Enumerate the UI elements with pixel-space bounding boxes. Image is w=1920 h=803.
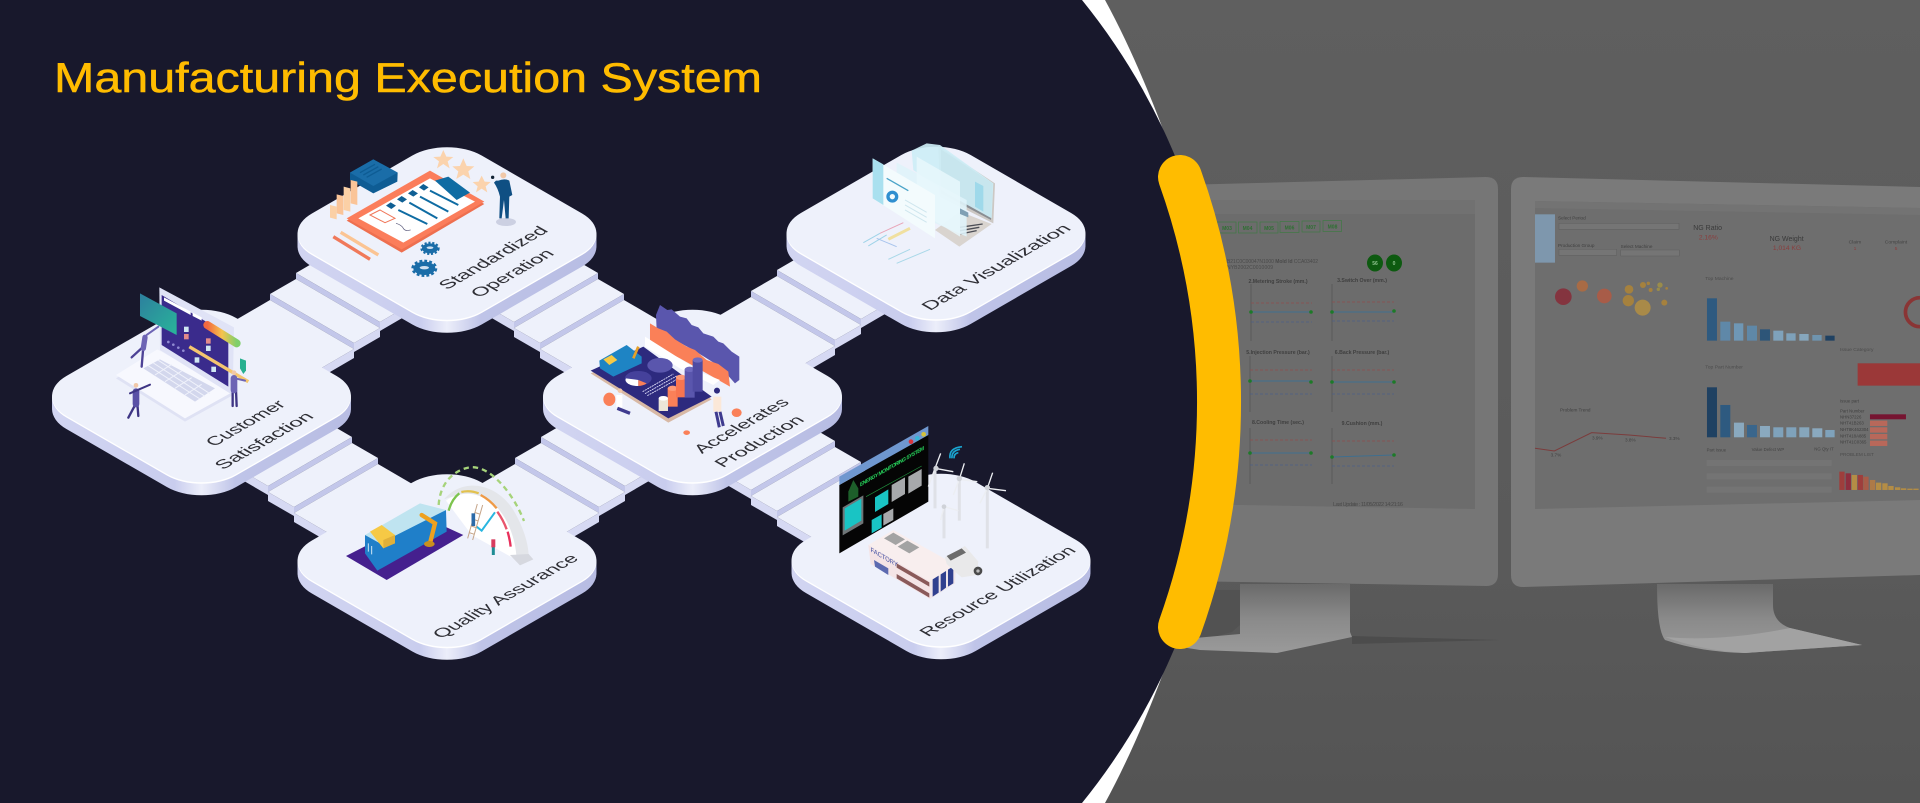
small line charts: 6.Back Pressure (bar.) — [1335, 350, 1390, 356]
illustration: laptop with glass dashboards — [863, 143, 995, 263]
filters: Select Period — [1558, 215, 1586, 220]
label: Quality Assurance — [428, 551, 583, 641]
label: Production — [710, 413, 809, 470]
icon: clipboard — [347, 171, 484, 253]
issue part list: NHT418A885 — [1840, 433, 1867, 438]
model id line: B21C0C00047N1000 Mold Id CCA03402 — [1227, 259, 1318, 265]
icon: board — [591, 347, 712, 423]
issue part list: NHN37226 — [1840, 414, 1862, 419]
person: on ladder — [468, 513, 479, 526]
panel: data visualization — [766, 135, 1106, 344]
stairs: accelerates to resource utilization — [727, 427, 897, 547]
model id line — [1227, 259, 1318, 271]
filters: Production Group — [1558, 243, 1595, 248]
icon: green tag — [240, 358, 246, 374]
icon: front panel — [873, 158, 935, 238]
right background — [1000, 0, 1920, 803]
icon: blue box — [350, 159, 398, 193]
navy panel — [0, 0, 1224, 803]
issue part list: Issue part — [1840, 399, 1860, 404]
kpis: 2.16% — [1699, 234, 1718, 241]
icon: long bar — [189, 347, 248, 382]
title: Manufacturing Execution System — [54, 54, 762, 101]
dashboard content — [1535, 214, 1920, 493]
kpis: 5 — [1895, 246, 1898, 252]
icon: monitoring screen — [839, 426, 928, 553]
icon: factory: FACTORY — [871, 547, 898, 570]
kpis: 1,014 KG — [1773, 245, 1801, 252]
stairs: accelerates to data visualization — [715, 256, 885, 376]
small line charts: 8.Cooling Time (sec.) — [1252, 420, 1304, 426]
top machine bars: Top Machine — [1705, 276, 1734, 282]
trend line: 3.9% — [1592, 435, 1603, 440]
icon: gears — [413, 243, 438, 275]
machine tabs: M05 — [1264, 226, 1274, 232]
trend line: Problem Trend — [1560, 408, 1591, 413]
kpis: Complaint — [1885, 239, 1908, 245]
pareto bars — [1839, 452, 1919, 490]
icon: wind turbines — [928, 453, 1006, 548]
icon: coins — [683, 408, 742, 435]
tile — [32, 298, 371, 507]
tile — [523, 298, 862, 507]
status circles: 0 — [1393, 261, 1396, 267]
small line charts: 2.Metering Stroke (mm.) — [1248, 279, 1308, 285]
white crescent bottom — [1060, 671, 1164, 803]
top part number bars: Top Part Number — [1705, 364, 1743, 370]
small line charts: 3.Switch Over (mm.) — [1337, 278, 1387, 284]
icon: gauge arch — [444, 486, 533, 565]
person: standing — [714, 388, 723, 427]
chart: pies — [625, 358, 673, 386]
panel: resource utilization — [771, 426, 1111, 671]
trend line: 3.7% — [1551, 453, 1561, 458]
machine tabs: M06 — [1285, 226, 1295, 232]
label: Customer — [201, 397, 291, 449]
label: Operation — [466, 246, 559, 300]
icon: injection machine — [365, 503, 447, 571]
illustration: production board — [591, 305, 742, 435]
chart: purple ridge — [656, 305, 739, 383]
filters — [1535, 214, 1679, 263]
icon: laptop — [116, 287, 234, 422]
panel: customer satisfaction — [32, 287, 371, 507]
monitor left stand — [1150, 584, 1500, 653]
status circles — [1367, 254, 1402, 272]
machine tabs: M04 — [1243, 226, 1253, 232]
small line charts: 5.Injection Pressure (bar.) — [1246, 350, 1310, 356]
chart: cylinders — [659, 357, 703, 411]
issue part list: NHT41B263 — [1840, 421, 1864, 426]
icon: robot arm — [422, 515, 435, 547]
white crescent top — [1060, 0, 1164, 132]
monitor right stand — [1657, 584, 1862, 653]
top machine bars — [1705, 276, 1835, 341]
label: Accelerates — [689, 395, 794, 456]
person: reaching panel — [132, 327, 158, 367]
chart: orange ridge — [650, 323, 730, 387]
filters: Select Machine — [1621, 244, 1653, 249]
monitor right — [1511, 177, 1920, 653]
machine tabs — [1217, 220, 1342, 233]
top part number bars — [1705, 364, 1835, 437]
icon: laptop — [935, 146, 995, 247]
small line charts: 9.Cushion (mm.) — [1342, 421, 1383, 427]
model id line: NYB2002C0010009 — [1227, 265, 1273, 271]
tile — [771, 462, 1111, 671]
machine tabs: M08 — [1328, 224, 1338, 230]
text lines — [643, 374, 679, 396]
tile — [277, 136, 617, 344]
icon: man in suit — [491, 172, 516, 226]
issue weight bar — [1840, 347, 1920, 386]
illustration: machine and gauge — [346, 467, 533, 580]
illustration: clipboard and charts — [330, 150, 516, 275]
bubble chart — [1555, 280, 1668, 316]
icon: pencils — [333, 232, 378, 259]
trend line — [1535, 408, 1680, 458]
kpis: NG Weight — [1770, 236, 1804, 243]
label — [689, 395, 809, 470]
person: bottom left — [128, 383, 150, 418]
monitor left frame — [1180, 177, 1498, 586]
icon: peach bars — [330, 180, 357, 219]
person: seated — [603, 388, 630, 413]
icon: ladder — [468, 504, 483, 540]
label — [434, 223, 559, 300]
illustration: laptop and team — [116, 287, 248, 422]
label: Resource Utilization — [915, 543, 1080, 639]
table rows: NG Qty IT — [1814, 446, 1834, 451]
table rows — [1707, 446, 1834, 493]
monitor right screen — [1535, 201, 1920, 509]
issue part list: NHT8K462304 — [1840, 427, 1869, 432]
status circles: 56 — [1372, 261, 1378, 267]
stairs: standardized to customer — [234, 259, 404, 379]
machine tabs: M07 — [1306, 225, 1316, 231]
issue part list: Part Number — [1840, 409, 1865, 414]
monitor left — [1150, 177, 1500, 653]
person: right — [232, 370, 245, 406]
kpis: Claim — [1849, 239, 1861, 245]
person: standing — [489, 539, 498, 555]
icon: machine — [599, 345, 642, 377]
panel: standardized operation — [277, 136, 617, 344]
table rows: Value Defect WP — [1752, 447, 1784, 452]
donut — [1905, 298, 1920, 327]
monitor right frame — [1511, 177, 1920, 587]
tile — [766, 135, 1106, 344]
stairs: accelerates to quality — [479, 423, 649, 543]
kpis: NG Ratio — [1693, 225, 1722, 232]
issue part list: NHT41C0365 — [1840, 440, 1867, 445]
tile — [277, 462, 617, 672]
label: Satisfaction — [210, 409, 318, 472]
small line charts — [1246, 278, 1396, 484]
icon: glass panels — [897, 143, 993, 237]
illustration: energy monitoring — [839, 426, 1006, 599]
chart: small floor charts — [863, 223, 930, 263]
table rows: Part Issue — [1707, 448, 1727, 453]
trend line: 3.3% — [1669, 436, 1680, 441]
label — [201, 397, 318, 472]
icon: purple base — [346, 517, 463, 580]
icon: stars — [433, 150, 491, 192]
icon: teal panel — [140, 293, 177, 335]
trend line: 3.8% — [1625, 437, 1636, 442]
stairs: customer to quality — [244, 423, 414, 543]
pareto bars: PROBLEM LIST — [1840, 452, 1874, 457]
issue weight bar: Issue Category — [1840, 347, 1874, 353]
icon: gauge colors — [449, 491, 511, 547]
monitor left screen — [1180, 200, 1475, 509]
icon: colored pill — [207, 325, 237, 343]
icon: wifi — [950, 447, 962, 458]
icon: generator — [945, 546, 982, 577]
label: Data Visualization — [917, 221, 1075, 313]
kpis — [1693, 225, 1908, 252]
panel: accelerates production — [523, 298, 862, 507]
chart: white ridge — [645, 337, 720, 385]
label: Standardized — [434, 223, 553, 292]
icon: dashed arc — [439, 467, 524, 521]
yellow arc — [1180, 177, 1219, 627]
icon: check mark — [477, 512, 495, 531]
icon: monitoring screen: ENERGY MONITORING SYSTEM — [860, 446, 924, 489]
issue part list — [1840, 399, 1906, 446]
panel: quality assurance — [277, 462, 617, 672]
kpis: 1 — [1854, 246, 1857, 252]
icon: factory — [868, 530, 956, 599]
stairs: standardized to accelerates — [490, 259, 660, 379]
machine tabs: M03 — [1222, 226, 1232, 232]
last update: Last Update : 11/05/2022 14:21:16 — [1333, 502, 1403, 508]
